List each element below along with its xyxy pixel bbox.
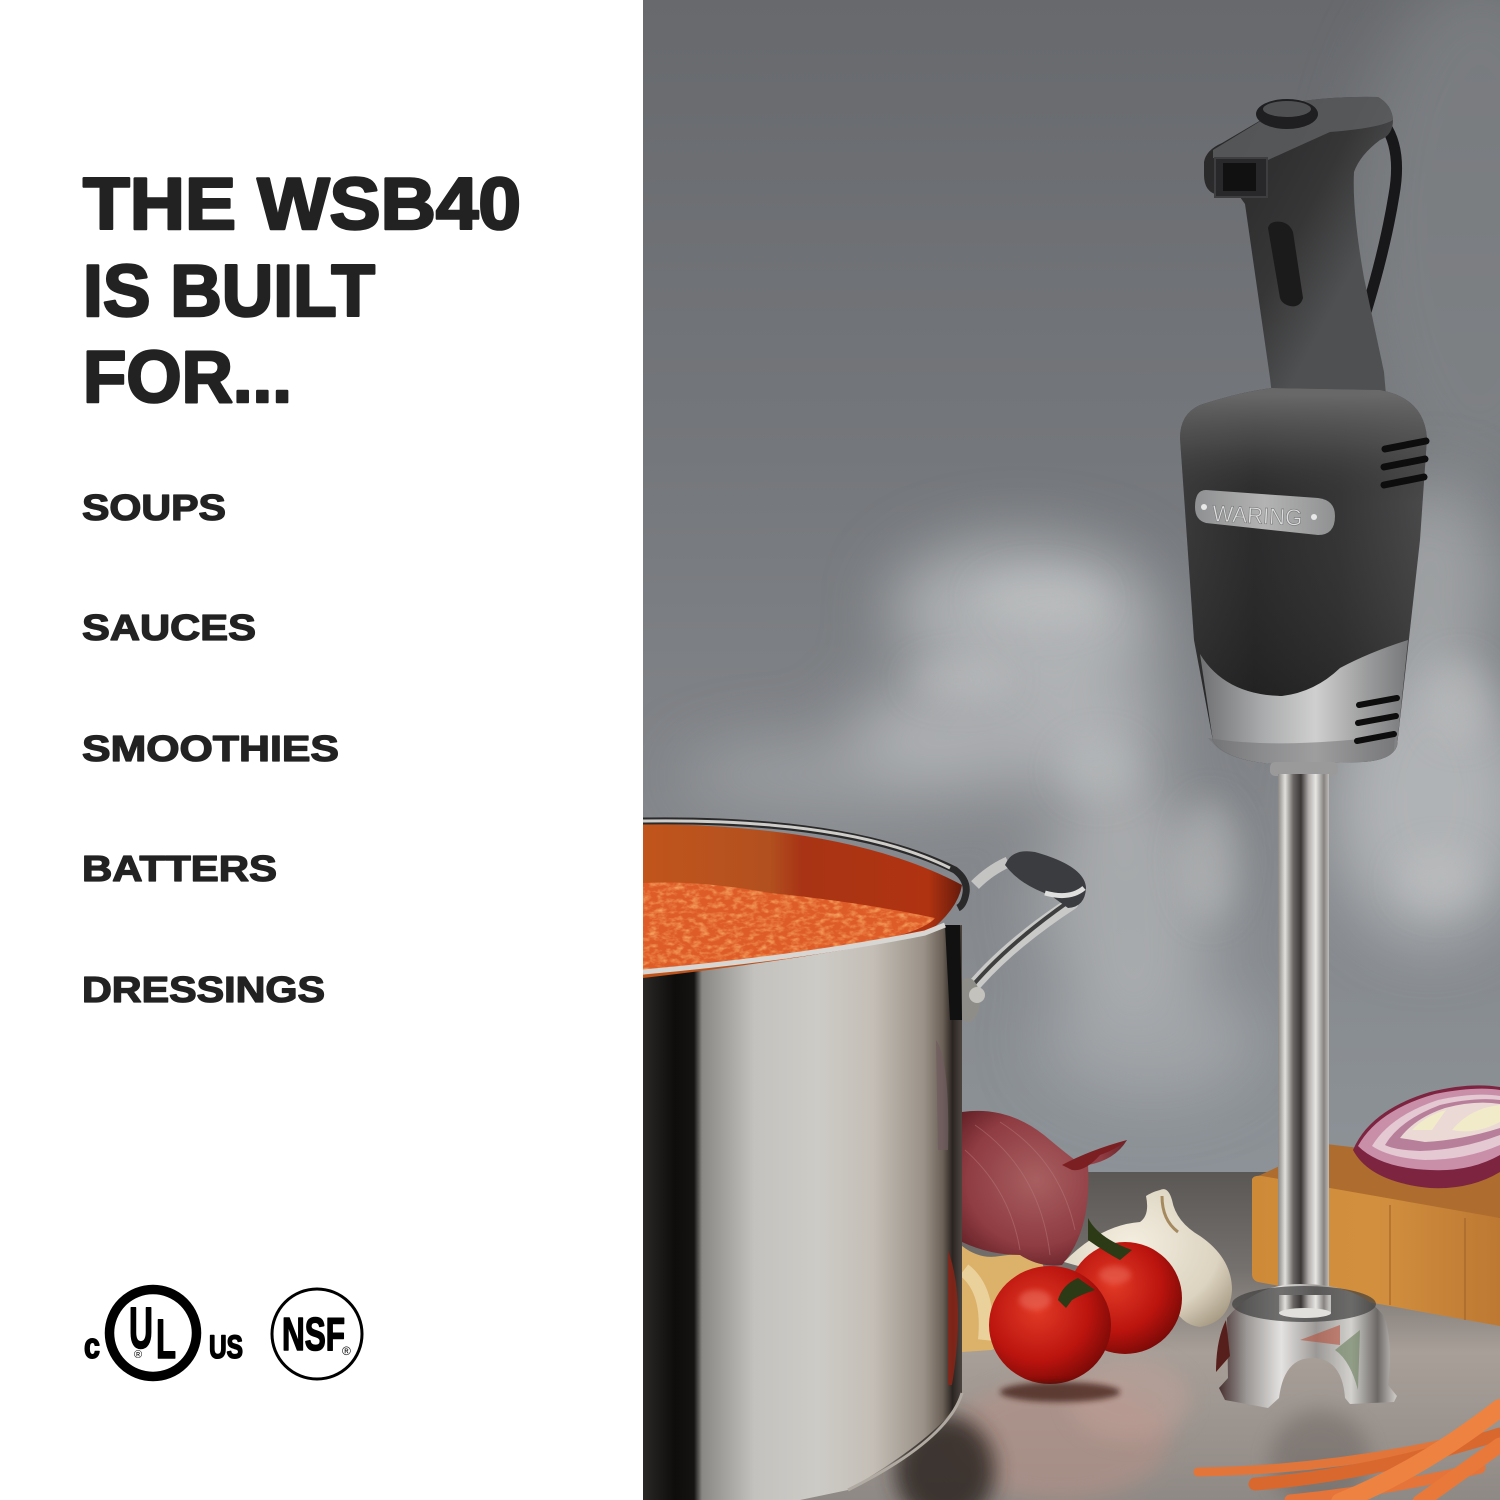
list of uses: BATTERS — [82, 848, 277, 889]
blender cable — [1365, 125, 1397, 315]
garlic bulb — [1064, 1189, 1232, 1327]
blender body housing — [1180, 388, 1427, 764]
icon: cUL us certification mark: L — [156, 1307, 176, 1370]
blender foot — [1216, 1284, 1397, 1408]
stockpot rim and interior — [643, 821, 966, 978]
panel: white text column — [0, 0, 643, 1500]
red onion half — [1353, 1085, 1500, 1188]
title: THE WSB40 — [83, 164, 521, 245]
icon: NSF certification mark: NSF — [282, 1308, 345, 1360]
yellow onion — [962, 1246, 1044, 1352]
icon: cUL us certification mark: c — [84, 1325, 100, 1366]
backdrop with steam clouds — [643, 0, 1500, 1172]
icon: cUL us certification mark: US — [209, 1329, 243, 1365]
tomatoes — [989, 1218, 1182, 1402]
icon: NSF certification mark — [272, 1289, 362, 1379]
list of uses — [82, 487, 339, 1010]
stainless table top — [790, 1172, 1500, 1500]
icon: cUL us certification mark: U — [129, 1296, 153, 1361]
blender rocker switch — [1215, 158, 1267, 197]
title — [83, 164, 521, 418]
blender top button — [1256, 99, 1318, 129]
red onion whole — [962, 1111, 1127, 1266]
list of uses: SMOOTHIES — [82, 728, 339, 769]
stockpot body — [643, 925, 962, 1500]
Waring name plate: WARING — [1212, 500, 1303, 531]
Waring name plate — [1195, 490, 1335, 535]
blender vents — [1357, 441, 1426, 741]
icon: cUL us certification mark: ® — [134, 1349, 142, 1361]
blender brushed metal band — [1200, 640, 1408, 764]
cutting board — [1252, 1144, 1500, 1326]
list of uses: DRESSINGS — [82, 969, 325, 1010]
title: FOR... — [83, 337, 292, 418]
panel: kitchen product photo scene — [643, 0, 1500, 1500]
title: IS BUILT — [83, 251, 375, 332]
list of uses: SAUCES — [82, 607, 256, 648]
stockpot handle — [956, 851, 1086, 1022]
icon: cUL us certification mark — [84, 1290, 243, 1376]
blender shaft — [1270, 762, 1338, 1298]
icon: NSF certification mark: ® — [342, 1344, 351, 1358]
list of uses: SOUPS — [82, 487, 226, 528]
carrots — [1198, 1408, 1500, 1500]
blender handle — [1204, 97, 1393, 395]
blender grip slot — [1268, 222, 1303, 306]
